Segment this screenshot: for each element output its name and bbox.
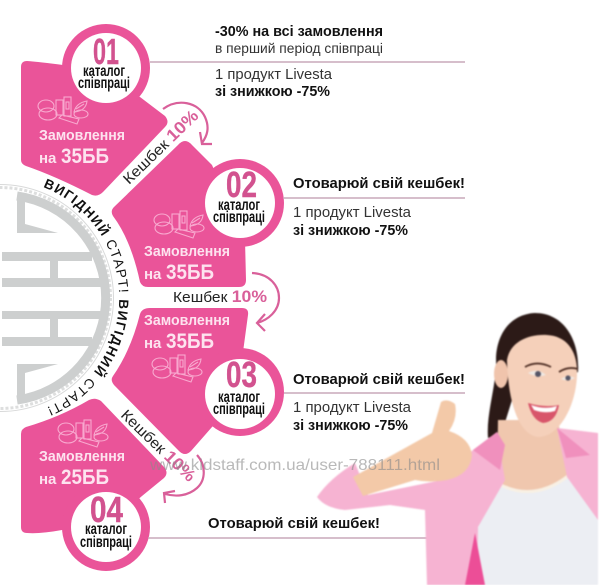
text block: step 4: Отоварюй свій кешбек! — [208, 515, 380, 532]
icon: cosmetics — [58, 420, 108, 447]
order text: Замовлення — [144, 243, 230, 260]
collars — [473, 428, 590, 470]
circle badge 02 — [196, 159, 284, 247]
hair — [488, 313, 578, 438]
panel: step 1 — [21, 24, 168, 196]
face — [507, 335, 577, 437]
circle badge 01 — [62, 24, 150, 112]
text block: step 2: зі знижкою -75% — [293, 222, 408, 239]
circle badge 04: співпраці — [80, 534, 132, 551]
arrow 2 — [252, 273, 279, 331]
shirt — [317, 432, 505, 585]
order text: 35ББ — [166, 261, 214, 284]
circle badge 04: каталог — [85, 521, 127, 538]
cashback label 2: Кешбек 10% — [173, 287, 267, 306]
circle badge 02: співпраці — [213, 209, 265, 226]
circular slogan: ВИГІДНИЙ СТАРТ! ВИГІДНИЙ СТАРТ! — [44, 178, 128, 416]
order text — [144, 312, 230, 353]
circle badge 02: 02 — [226, 164, 257, 205]
text block: step 1: 1 продукт Livesta — [215, 66, 333, 83]
order text: на — [144, 335, 162, 352]
circle badge 04: 04 — [90, 489, 123, 530]
panel: step 3 — [112, 308, 284, 454]
icon: cosmetics — [154, 211, 204, 238]
neck and chest — [497, 420, 568, 493]
text block: step 3 — [284, 371, 465, 434]
white top — [477, 476, 598, 585]
watermark: www.kidstaff.com.ua/user-788111.html — [149, 457, 440, 474]
order text: 35ББ — [166, 330, 214, 353]
eyes — [528, 371, 575, 380]
order text: на — [39, 471, 57, 488]
circle badge 01: 01 — [93, 31, 119, 72]
arm and hand — [353, 400, 472, 496]
text block: step 2: Отоварюй свій кешбек! — [293, 175, 465, 192]
order text: 35ББ — [61, 145, 109, 168]
circle badge 03: співпраці — [213, 401, 265, 418]
order text: на — [144, 266, 162, 283]
emblem: circular logo — [0, 184, 114, 412]
arrow 1 — [163, 103, 212, 144]
panel: step 2 — [112, 141, 284, 287]
circle badge 01: співпраці — [78, 75, 130, 92]
cashback label 3: Кешбек 10% — [117, 405, 199, 486]
order text: на — [39, 150, 57, 167]
order text — [39, 127, 125, 168]
ear — [494, 360, 508, 388]
icon: cosmetics — [38, 97, 88, 124]
order text: Замовлення — [39, 127, 125, 144]
text block: step 3: зі знижкою -75% — [293, 417, 408, 434]
text block: step 3: 1 продукт Livesta — [293, 399, 412, 416]
circle badge 03: 03 — [226, 354, 257, 395]
text block: step 2 — [283, 175, 465, 239]
order text — [144, 243, 230, 284]
circle badge 01: каталог — [83, 63, 125, 80]
text block: step 1: -30% на всі замовлення — [215, 23, 383, 40]
cashback label 1: Кешбек 10% — [119, 106, 202, 188]
circle badge 02: каталог — [218, 197, 260, 214]
text block: step 1: в перший період співпраці — [215, 40, 383, 56]
order text — [39, 448, 125, 489]
circle badge 03 — [196, 348, 284, 436]
order text: Замовлення — [144, 312, 230, 329]
order text: Замовлення — [39, 448, 125, 465]
text block: step 3: Отоварюй свій кешбек! — [293, 371, 465, 388]
arrow 3 — [164, 455, 204, 503]
mouth — [528, 403, 559, 423]
photo: smiling woman with thumbs up — [317, 313, 598, 585]
text block: step 1 — [150, 23, 465, 100]
icon: cosmetics — [152, 355, 202, 382]
order text: 25ББ — [61, 466, 109, 489]
text block: step 1: зі знижкою -75% — [215, 83, 330, 100]
circle badge 04 — [62, 483, 150, 571]
text block: step 2: 1 продукт Livesta — [293, 204, 412, 221]
panel: step 4 — [21, 399, 166, 571]
circle badge 03: каталог — [218, 389, 260, 406]
